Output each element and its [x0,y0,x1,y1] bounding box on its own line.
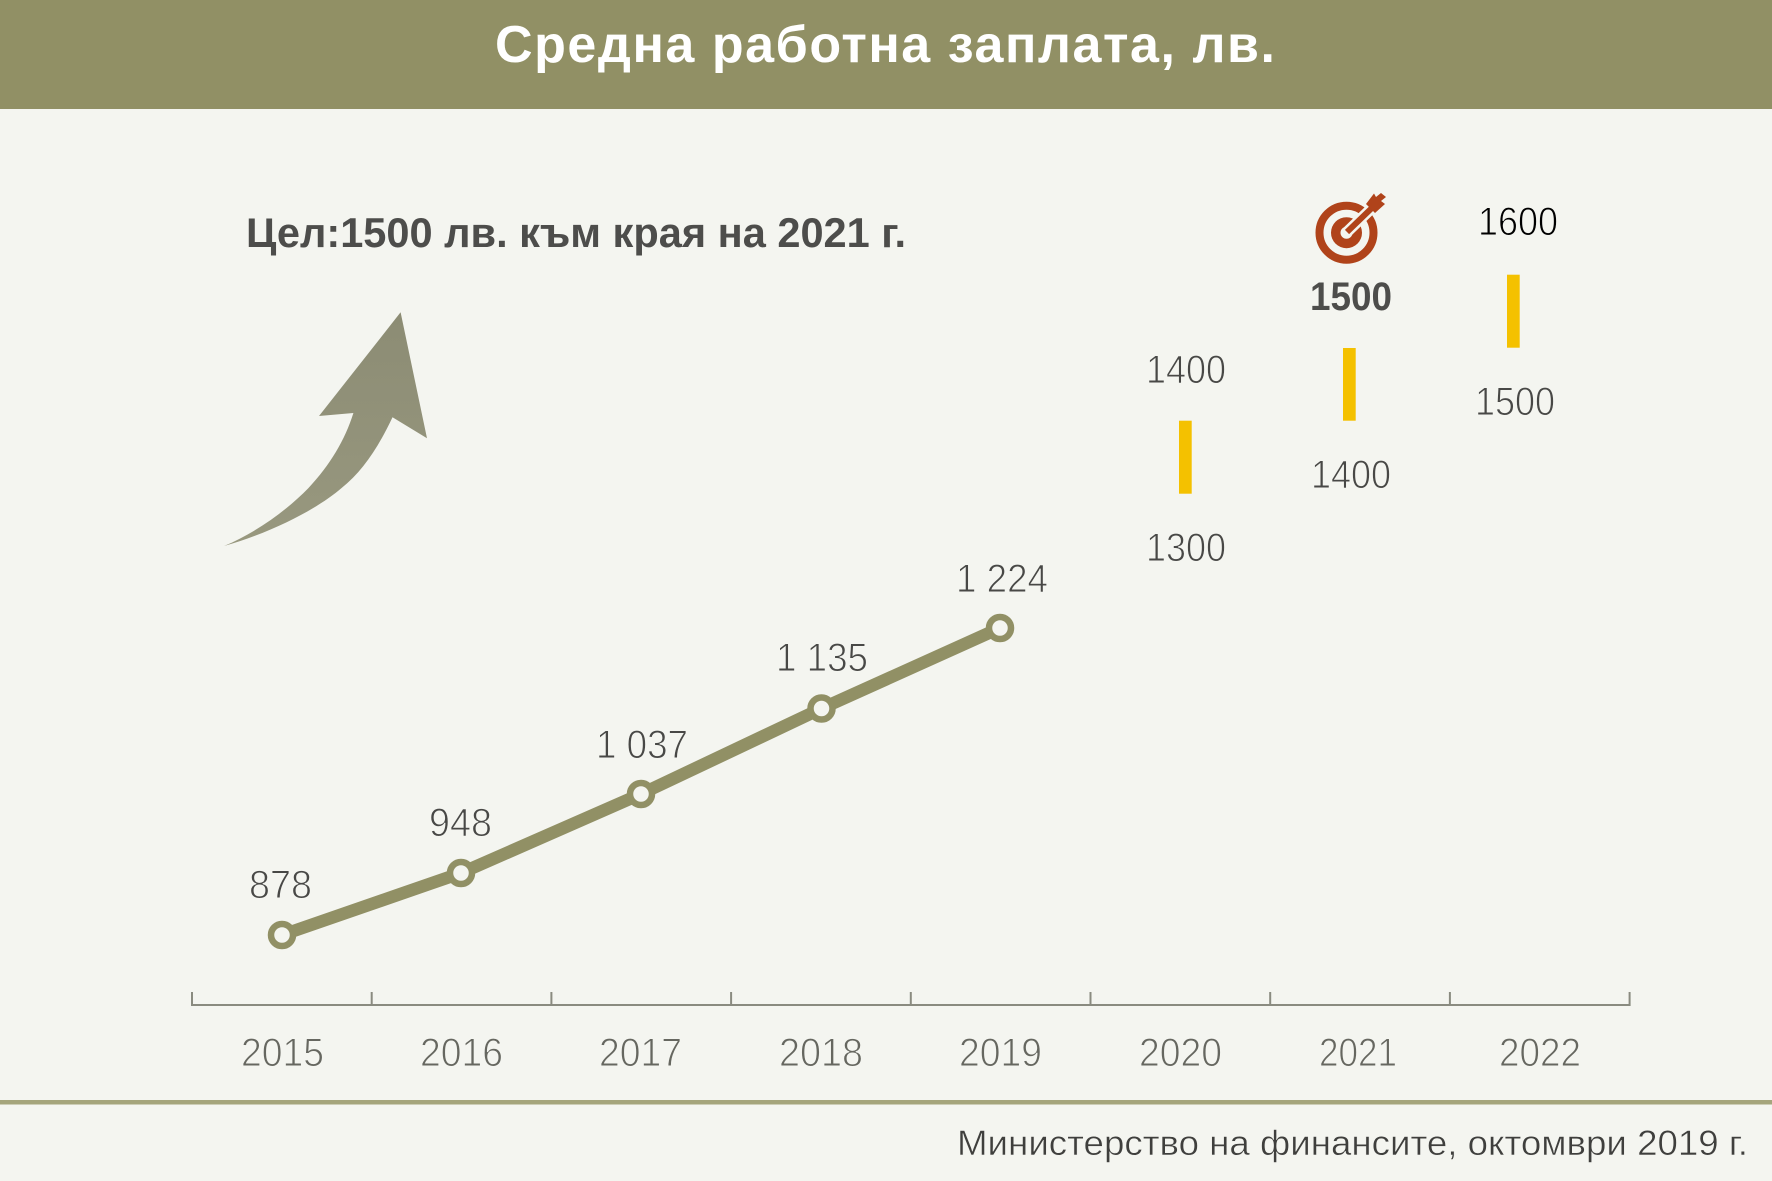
data point 2019 [989,617,1011,639]
title: Средна работна заплата, лв. [495,16,1275,74]
axis year labels [241,1031,1581,1075]
forecast range 2022: 1600 [1478,200,1558,244]
year 2018: 2018 [779,1031,863,1075]
year 2019: 2019 [959,1031,1042,1075]
data point 2018 [810,698,832,720]
data point 2015 [271,924,293,946]
forecast range 2021: 1500 [1310,275,1392,319]
footer rule [0,1100,1772,1104]
year 2021: 2021 [1319,1031,1397,1075]
value 2019: 1 224 [956,557,1048,601]
forecast range 2022 [1475,200,1558,424]
forecast range 2020: 1300 [1146,526,1226,570]
forecast range 2021: 1400 [1311,453,1391,497]
icon: target with arrow [1320,193,1386,260]
value labels [249,557,1048,907]
forecast range 2021 [1310,275,1392,497]
icon: rising arrow [224,312,427,546]
year 2015: 2015 [241,1031,324,1075]
year 2022: 2022 [1499,1031,1581,1075]
goal statement: Цел:1500 лв. към края на 2021 г. [246,209,906,256]
x axis [192,992,1630,1005]
value 2017: 1 037 [596,723,688,767]
value 2015: 878 [249,863,312,907]
line chart: actual wages 2015-2019 [271,617,1011,946]
value 2018: 1 135 [776,636,868,680]
data point 2016 [450,862,472,884]
value 2016: 948 [429,801,492,845]
data point 2017 [630,783,652,805]
year 2016: 2016 [420,1031,503,1075]
forecast range 2022: 1500 [1475,380,1555,424]
year 2017: 2017 [599,1031,682,1075]
source note: Министерство на финансите, октомври 2019 г. [957,1124,1748,1163]
forecast range 2020 [1146,348,1226,570]
forecast range 2020: 1400 [1146,348,1226,392]
header band [0,0,1772,109]
year 2020: 2020 [1139,1031,1222,1075]
